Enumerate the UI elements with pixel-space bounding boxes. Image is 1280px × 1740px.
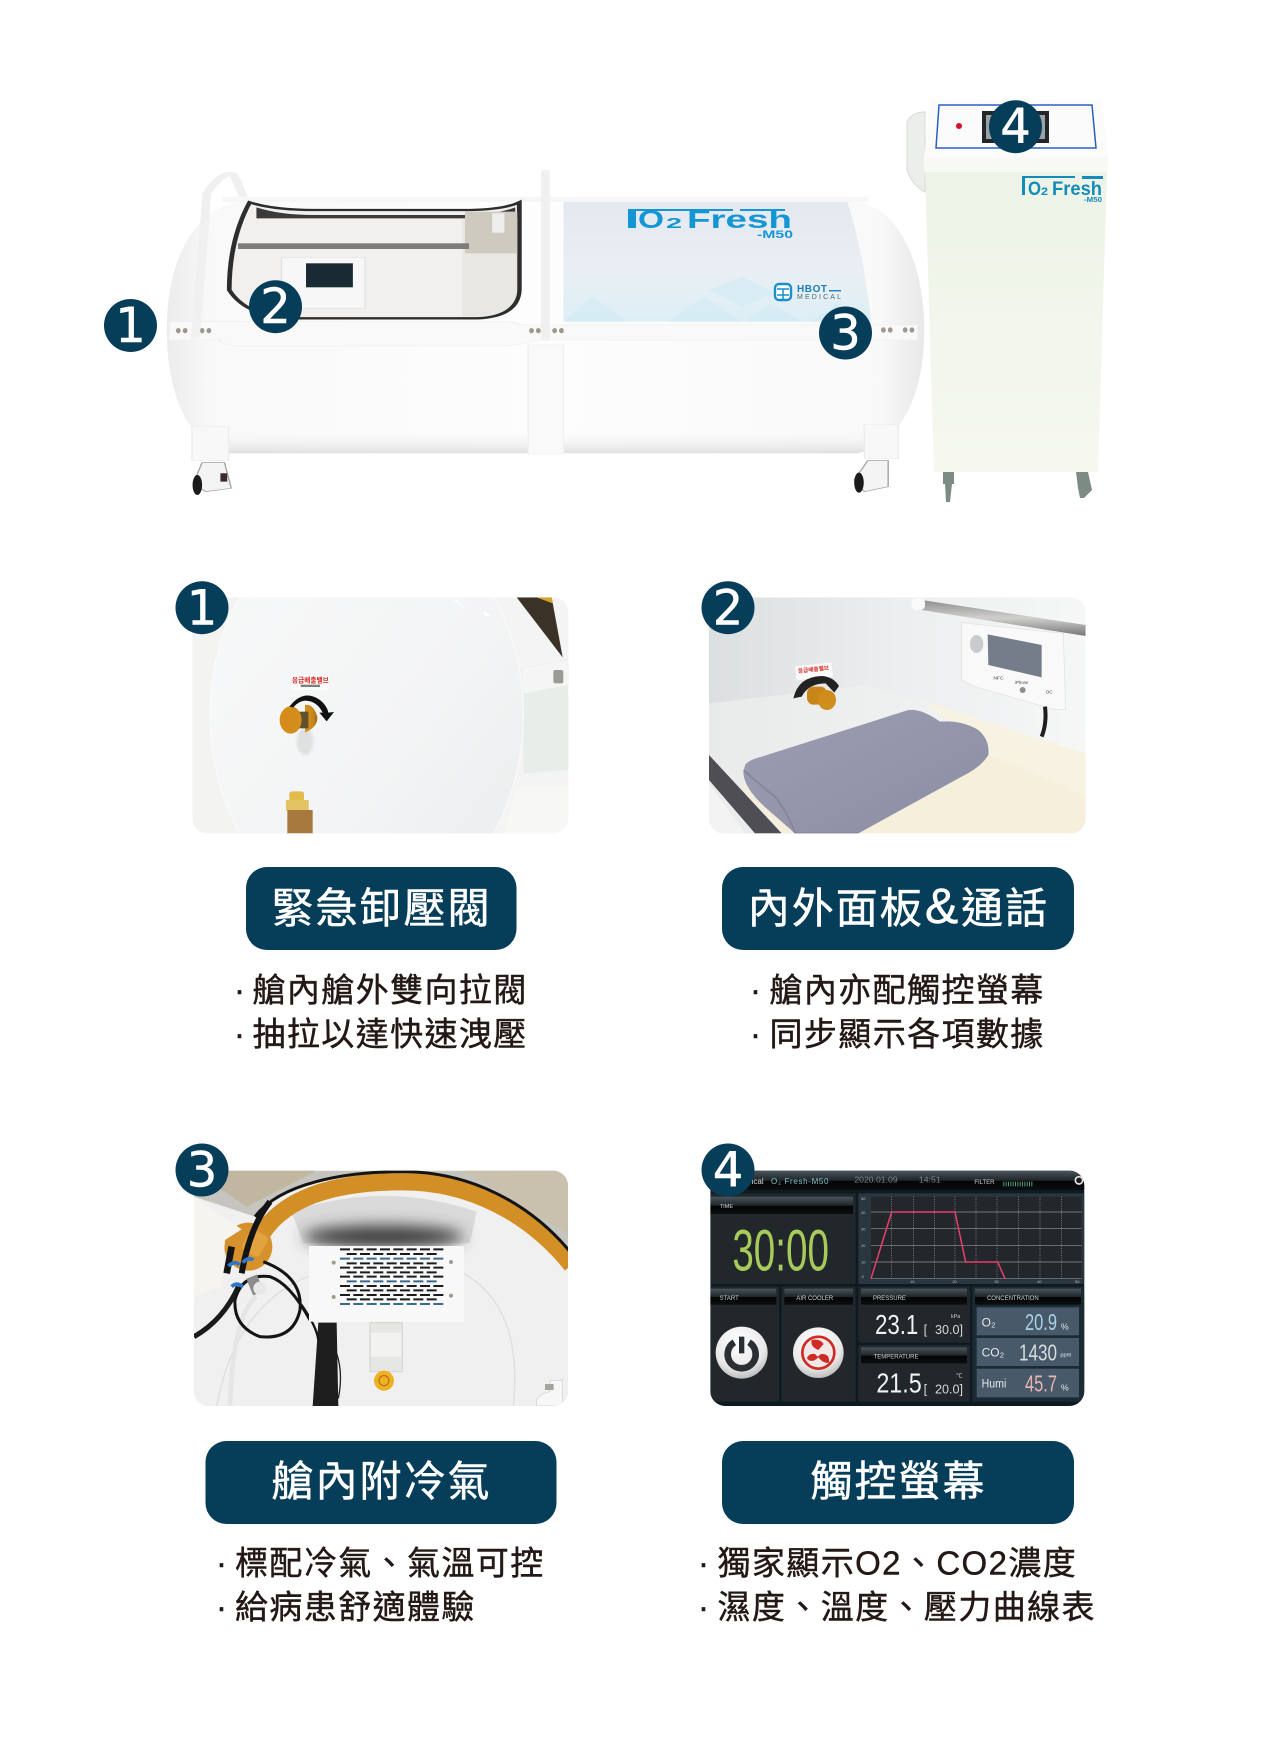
drain cylinder (370, 1323, 402, 1372)
photo: touch screen UI: CONCENTRATION (987, 1296, 1039, 1302)
photo: touch screen UI: 20 (952, 1279, 958, 1284)
vented plate (309, 1246, 464, 1322)
photo: chamber interior with pillow: OC (1046, 689, 1053, 694)
badge: hero 1 (104, 298, 157, 354)
heading pill: 艙內附冷氣 (271, 1458, 492, 1505)
badge 2: 2 (713, 580, 743, 636)
photo: touch screen UI: 30.0] (935, 1323, 963, 1337)
badge 3 (176, 1142, 228, 1198)
heading pill: 緊急卸壓閥 (271, 885, 492, 932)
photo: touch screen UI: Humi (982, 1376, 1006, 1390)
bullet text: · (698, 1588, 710, 1626)
logo on console: O (1028, 179, 1041, 200)
photo: touch screen UI: 2020.01.09 (854, 1175, 898, 1185)
temperature (858, 1345, 970, 1402)
bullet text (216, 1544, 545, 1626)
photo: touch screen UI: 45.7 (1025, 1371, 1057, 1397)
rail (922, 600, 1086, 636)
heading pill: 內外面板&通話 (748, 878, 1049, 934)
photo: touch screen UI: 30:00 (732, 1219, 829, 1284)
bullet text: · (216, 1588, 228, 1626)
logo on chamber: O (638, 206, 664, 234)
photo: touch screen UI: FILTER (974, 1180, 995, 1186)
photo: air conditioner unit (194, 1171, 572, 1406)
logo on console: Fresh (1052, 179, 1102, 200)
logo on console: -M50 (1084, 197, 1102, 204)
orange ring and black seal (260, 1182, 572, 1265)
bullet text: · (698, 1544, 710, 1582)
photo: touch screen UI: 10 (861, 1260, 866, 1265)
heading pill (246, 867, 516, 950)
window (229, 202, 519, 318)
logo: HBOT medical (775, 284, 841, 301)
time (710, 1193, 856, 1284)
badge 1 (176, 580, 228, 636)
bullet text: · (750, 972, 762, 1008)
photo: touch screen UI: kPa (951, 1314, 960, 1320)
console casters (943, 472, 954, 502)
photo: touch screen UI: 50 (1075, 1279, 1080, 1284)
photo: touch screen UI: CO₂ (982, 1346, 1005, 1360)
bullet text: 給病患舒適體驗 (235, 1588, 476, 1626)
photo: touch screen UI: 40 (1037, 1279, 1042, 1284)
band with screws (168, 322, 917, 346)
photo: touch screen UI: % (1061, 1321, 1069, 1331)
heading pill (206, 1441, 556, 1524)
graph (858, 1193, 1084, 1284)
photo: touch screen UI: O₂ (982, 1316, 996, 1330)
photo: touch screen UI: 30 (994, 1279, 1000, 1284)
logo: HBOT medical: HBOT (797, 284, 827, 295)
badge: hero 2: 2 (260, 279, 291, 335)
logo on console: 2 (1041, 186, 1048, 198)
panel: emergency relief valve (176, 581, 568, 1049)
bullet text (234, 972, 528, 1052)
logo on chamber: -M50 (757, 229, 793, 241)
start (710, 1287, 779, 1402)
blue printed panel (563, 202, 871, 322)
handles (195, 174, 244, 338)
photo: touch screen UI: 20.0] (935, 1382, 963, 1396)
bullet text: 獨家顯示O2、CO2濃度 (718, 1544, 1077, 1582)
photo: valve on chamber end (192, 597, 568, 834)
heading pill (722, 1441, 1074, 1524)
logo on chamber: Fresh (687, 206, 792, 234)
bullet text: 艙內亦配觸控螢幕 (770, 972, 1045, 1008)
logo on chamber (628, 206, 793, 241)
photo: touch screen UI: 50 (861, 1196, 866, 1201)
bullet text: 同步顯示各項數據 (770, 1016, 1045, 1052)
hero: hyperbaric chamber with console (167, 100, 1108, 502)
logo on chamber: 2 (666, 215, 682, 232)
concentration (972, 1287, 1084, 1402)
photo: touch screen UI: ppm (1060, 1353, 1072, 1359)
photo: chamber interior with pillow (709, 597, 1086, 833)
photo: touch screen UI: START (720, 1296, 739, 1302)
bullet text: 濕度、溫度、壓力曲線表 (718, 1588, 1096, 1626)
cables (242, 1202, 270, 1273)
badge: hero 1: 1 (115, 298, 146, 354)
photo: touch screen UI: 23.1 (875, 1309, 918, 1340)
bullet text: 標配冷氣、氣溫可控 (235, 1544, 545, 1582)
control panel frame (936, 105, 1096, 148)
photo: touch screen UI: TEMPERATURE (874, 1354, 918, 1360)
bullet text: · (216, 1544, 228, 1582)
photo: touch screen UI: TIME (720, 1204, 733, 1210)
photo: touch screen UI: 20 (861, 1243, 866, 1248)
bullet text (750, 972, 1045, 1052)
photo: touch screen UI: ℃ (956, 1373, 962, 1380)
photo: valve on chamber end: 응급배출밸브 (292, 676, 329, 685)
photo: chamber interior with pillow: iPhone (1015, 680, 1029, 685)
valve (795, 662, 833, 680)
logo on console (1022, 176, 1103, 204)
badge 3: 3 (187, 1142, 217, 1198)
pillow (743, 710, 989, 833)
badge 2 (702, 580, 754, 636)
bullet text: · (750, 1016, 762, 1052)
photo: touch screen UI: 1430 (1019, 1340, 1057, 1366)
feet and casters (192, 427, 229, 461)
badge: hero 3: 3 (830, 306, 861, 362)
badge 1: 1 (187, 580, 217, 636)
bullet text: · (234, 1016, 246, 1052)
bullet text: 抽拉以達快速洩壓 (252, 1016, 528, 1052)
panel: touch screen (698, 1142, 1096, 1626)
photo: chamber interior with pillow: 응급배출밸브 (798, 664, 829, 675)
photo: touch screen UI (710, 1171, 1084, 1406)
photo: touch screen UI: O₂ Fresh-M50 (771, 1177, 829, 1186)
photo: touch screen UI: PRESSURE (873, 1296, 906, 1302)
photo: touch screen UI: [ (924, 1382, 928, 1396)
photo: touch screen UI: 0 (862, 1274, 865, 1279)
corner clip (537, 1380, 563, 1406)
pressure (858, 1287, 970, 1343)
control box (962, 623, 1066, 709)
photo: touch screen UI: 30 (861, 1226, 866, 1231)
logo: HBOT medical: MEDICAL (797, 294, 841, 301)
panel: inner and outer panels with intercom (702, 580, 1086, 1052)
badge 4: 4 (713, 1142, 743, 1198)
badge: hero 2 (249, 279, 302, 335)
badge 4 (702, 1142, 754, 1198)
bullet text: 艙內艙外雙向拉閥 (252, 972, 528, 1008)
photo: touch screen UI: AIR COOLER (796, 1296, 834, 1302)
photo: touch screen UI: 40 (861, 1210, 866, 1215)
photo: touch screen UI: 14:51 (919, 1175, 941, 1185)
console (907, 100, 1108, 502)
photo: touch screen UI: [ (924, 1323, 928, 1337)
badge: hero 4: 4 (1000, 99, 1031, 155)
badge: hero 4 (989, 99, 1042, 155)
bullet text: · (234, 972, 246, 1008)
panel: in-chamber air conditioning (176, 1142, 572, 1626)
photo: chamber interior with pillow: NFC (993, 675, 1004, 681)
air cooler (782, 1287, 856, 1402)
photo: touch screen UI: 21.5 (876, 1367, 922, 1398)
heading pill: 觸控螢幕 (810, 1458, 987, 1505)
photo: touch screen UI: 20.9 (1025, 1309, 1057, 1335)
photo: touch screen UI: % (1061, 1383, 1069, 1393)
chamber body (167, 170, 924, 495)
heading pill (722, 867, 1074, 950)
photo: touch screen UI: 10 (910, 1279, 915, 1284)
bullet text (698, 1544, 1096, 1626)
left fitting (224, 1223, 272, 1271)
photo: touch screen UI: ical (752, 1177, 764, 1186)
badge: hero 3 (819, 306, 872, 362)
